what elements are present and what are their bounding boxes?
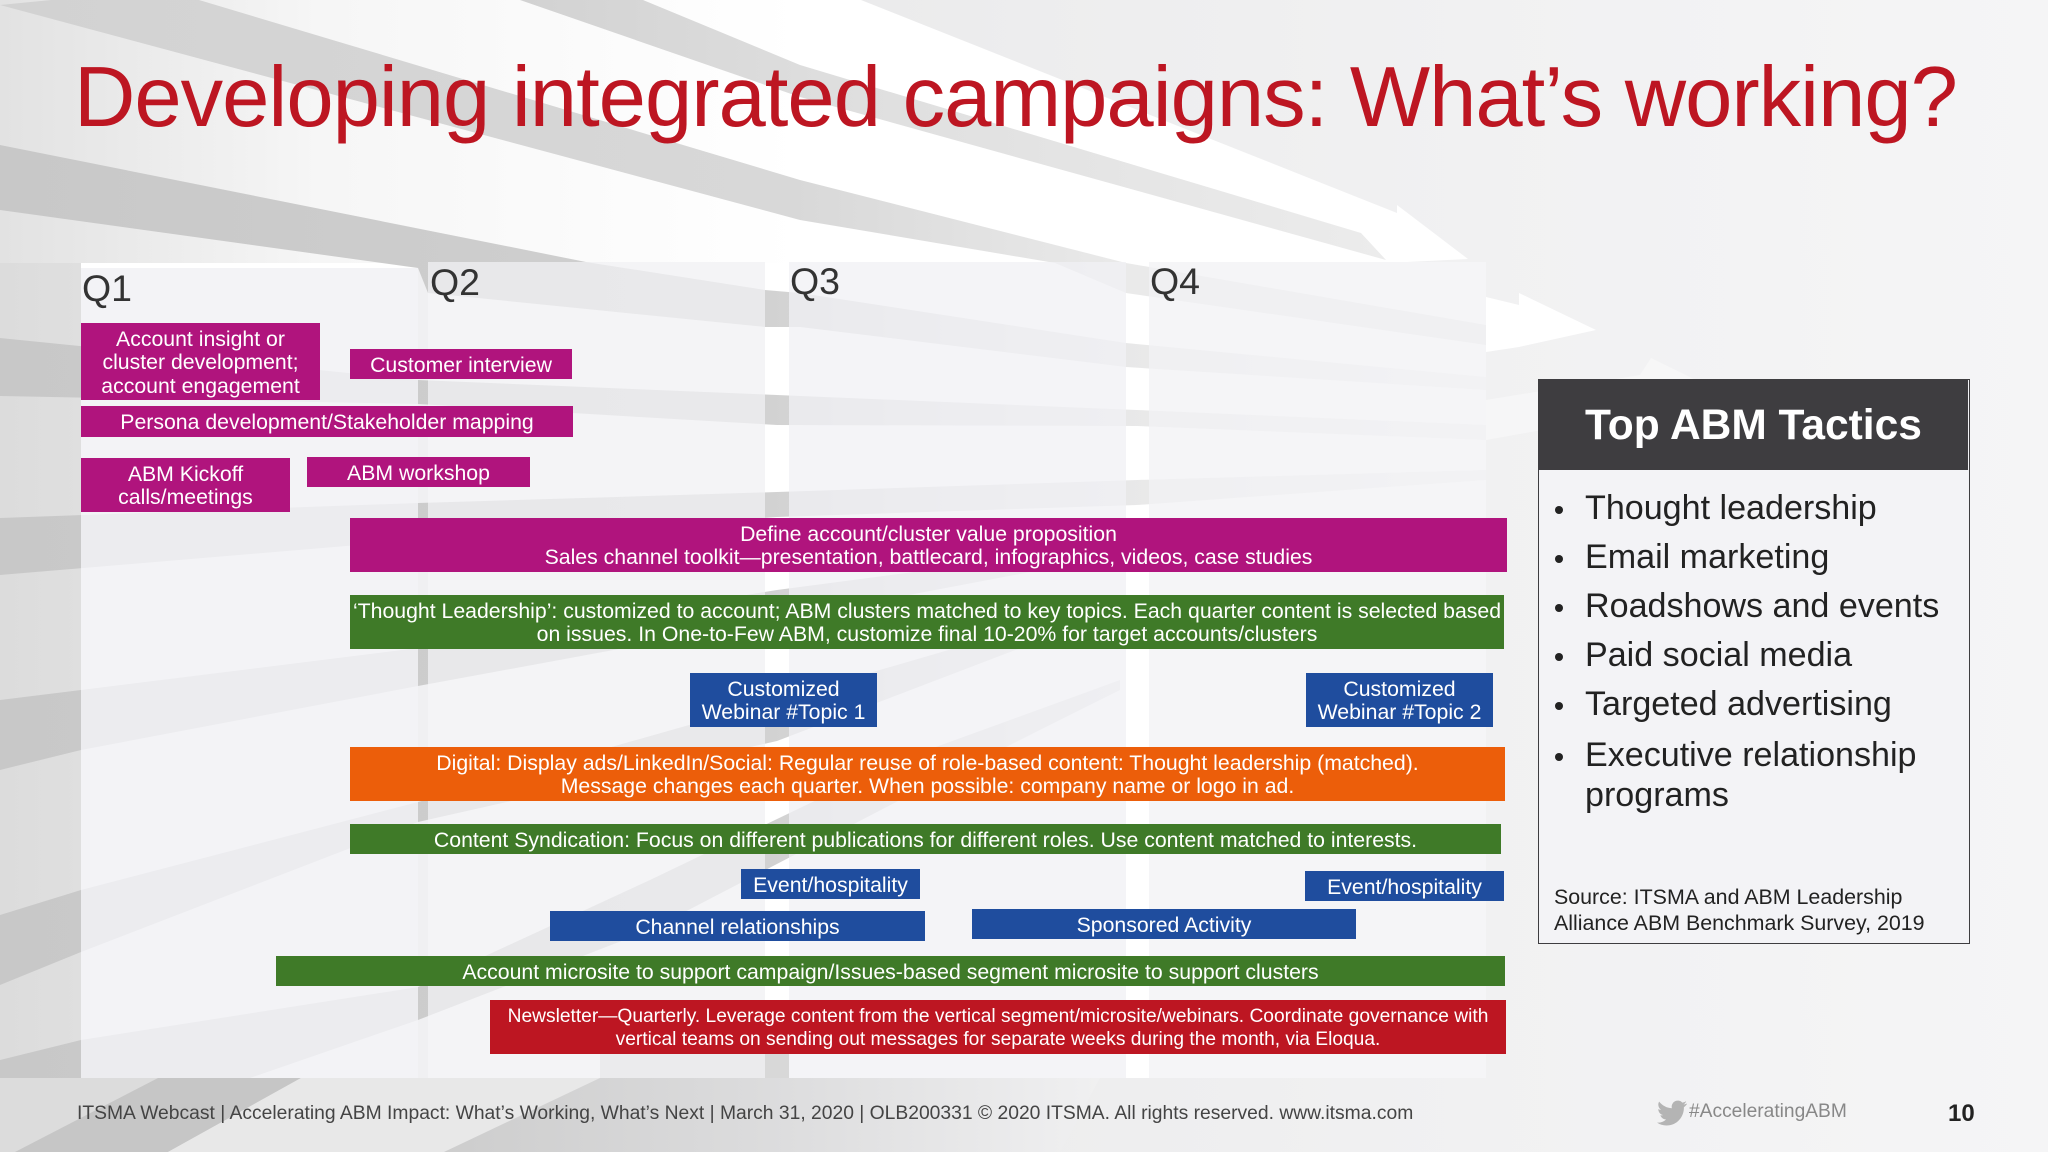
bar: ABM kickoff: calls/meetings <box>118 485 253 509</box>
bar: persona development <box>81 406 573 437</box>
page number: 10 <box>1948 1100 1975 1127</box>
title: Developing integrated campaigns: What’s working? <box>74 50 1957 145</box>
white upper wedge with arrow head <box>0 0 1468 263</box>
bullet 1 <box>1555 506 1563 514</box>
bullet 6 <box>1555 753 1563 761</box>
bar: webinar topic 1 <box>690 673 877 727</box>
bar: webinar topic 2 <box>1306 673 1493 727</box>
bar: value proposition: Sales channel toolkit—presentation, battlecard, infographics, videos, case studies <box>545 545 1312 569</box>
bottom strip <box>0 1078 158 1152</box>
bar: event hospitality 1 <box>741 869 920 899</box>
band e <box>0 338 1486 440</box>
bar: customer interview: Customer interview <box>370 352 552 376</box>
bar: content syndication: Content Syndication: Focus on different publications for different roles. Use content matched to interests. <box>434 828 1417 852</box>
source note: Alliance ABM Benchmark Survey, 2019 <box>1554 910 1925 934</box>
bar: account microsite: Account microsite to support campaign/Issues-based segment microsite to support clusters <box>462 960 1319 984</box>
bar: event hospitality 1: Event/hospitality <box>753 872 908 896</box>
bar: thought leadership: ‘Thought Leadership’: customized to account; ABM clusters matched to key topics. Each quarter content is selected based <box>353 599 1501 623</box>
bar: webinar topic 2: Customized <box>1343 677 1456 701</box>
panel: Q4 column <box>1149 262 1486 1078</box>
panel header <box>1539 380 1968 470</box>
tactic 3: Roadshows and events <box>1585 587 1939 625</box>
bar: ABM kickoff <box>81 458 290 512</box>
bar: thought leadership <box>350 595 1504 649</box>
heading: Q3: Q3 <box>790 260 840 302</box>
list: tactics <box>1555 489 1939 814</box>
heading: Q1: Q1 <box>82 267 132 309</box>
source note: Source: ITSMA and ABM Leadership <box>1554 885 1902 909</box>
tactic 1: Thought leadership <box>1585 489 1877 527</box>
band i <box>0 680 1120 1078</box>
bar: sponsored activity: Sponsored Activity <box>1077 912 1251 936</box>
bar: newsletter <box>490 1000 1506 1054</box>
band h <box>0 600 1120 985</box>
bar: newsletter: Newsletter—Quarterly. Leverage content from the vertical segment/microsite/webinars. Coordinate governance with <box>508 1006 1488 1027</box>
tactic 6: programs <box>1585 776 1729 814</box>
heading: Q2: Q2 <box>430 261 480 303</box>
panel: Q2 column <box>428 262 765 1078</box>
band g <box>0 545 1120 770</box>
bar: content syndication <box>350 824 1501 854</box>
panel: top ABM tactics <box>1538 379 1970 944</box>
bullet 3 <box>1555 604 1563 612</box>
bar: ABM workshop: ABM workshop <box>347 460 490 484</box>
tactic 4: Paid social media <box>1585 636 1852 674</box>
bar: ABM kickoff: ABM Kickoff <box>128 462 243 486</box>
bullet 4 <box>1555 653 1563 661</box>
right white arrows <box>1486 293 1596 352</box>
icon: twitter bird <box>1657 1100 1687 1126</box>
heading: Q4: Q4 <box>1150 260 1200 302</box>
bar: customer interview <box>350 349 572 379</box>
footer text: ITSMA Webcast | Accelerating ABM Impact: What’s Working, What’s Next | March 31, 2020 | OLB200331 © 2020 ITSMA. All rights reserved. www.itsma.com <box>77 1103 1413 1124</box>
hashtag: #AcceleratingABM <box>1689 1101 1847 1122</box>
band b <box>520 0 1386 260</box>
bar: thought leadership: on issues. In One-to-Few ABM, customize final 10-20% for target accounts/clusters <box>537 622 1317 646</box>
panel: Q3 column <box>789 262 1126 1078</box>
bullet 2 <box>1555 555 1563 563</box>
bar: sponsored activity <box>972 909 1356 939</box>
bar: account insight: account engagement <box>101 374 300 398</box>
band a <box>0 0 1486 345</box>
tactic 5: Targeted advertising <box>1585 685 1892 723</box>
bar: newsletter: vertical teams on sending out messages for separate weeks during the month, via Eloqua. <box>616 1029 1380 1050</box>
source note <box>1554 885 1925 934</box>
bar: account insight: Account insight or <box>116 326 285 350</box>
bar: ABM workshop <box>307 457 530 487</box>
bar: value proposition <box>350 518 1507 572</box>
bullet 5 <box>1555 702 1563 710</box>
bar: webinar topic 1: Customized <box>727 677 840 701</box>
tactic 6 <box>1585 736 1916 814</box>
bar: account insight <box>81 323 320 400</box>
tactic 2: Email marketing <box>1585 538 1829 576</box>
panel: Q1 column <box>81 268 418 1078</box>
bar: digital: Digital: Display ads/LinkedIn/Social: Regular reuse of role-based content: Thought leadership (matched). <box>436 751 1419 775</box>
bar: event hospitality 2 <box>1305 871 1504 901</box>
bar: webinar topic 1: Webinar #Topic 1 <box>702 700 865 724</box>
bar: value proposition: Define account/cluster value proposition <box>740 522 1117 546</box>
bar: webinar topic 2: Webinar #Topic 2 <box>1318 700 1481 724</box>
bar: digital: Message changes each quarter. When possible: company name or logo in ad. <box>561 774 1294 798</box>
band f <box>0 470 1486 575</box>
bar: channel relationships: Channel relationships <box>635 914 840 938</box>
bar: channel relationships <box>550 911 925 941</box>
bar: account insight: cluster development; <box>102 350 299 374</box>
bar: account microsite <box>276 956 1505 986</box>
bar: persona development: Persona development/Stakeholder mapping <box>120 410 534 434</box>
bar: digital <box>350 747 1505 801</box>
tactic 6: Executive relationship <box>1585 736 1916 774</box>
bar: event hospitality 2: Event/hospitality <box>1327 874 1482 898</box>
white under-area of panels <box>81 262 1486 1078</box>
heading: top ABM tactics: Top ABM Tactics <box>1585 402 1922 449</box>
band d <box>0 145 1486 390</box>
